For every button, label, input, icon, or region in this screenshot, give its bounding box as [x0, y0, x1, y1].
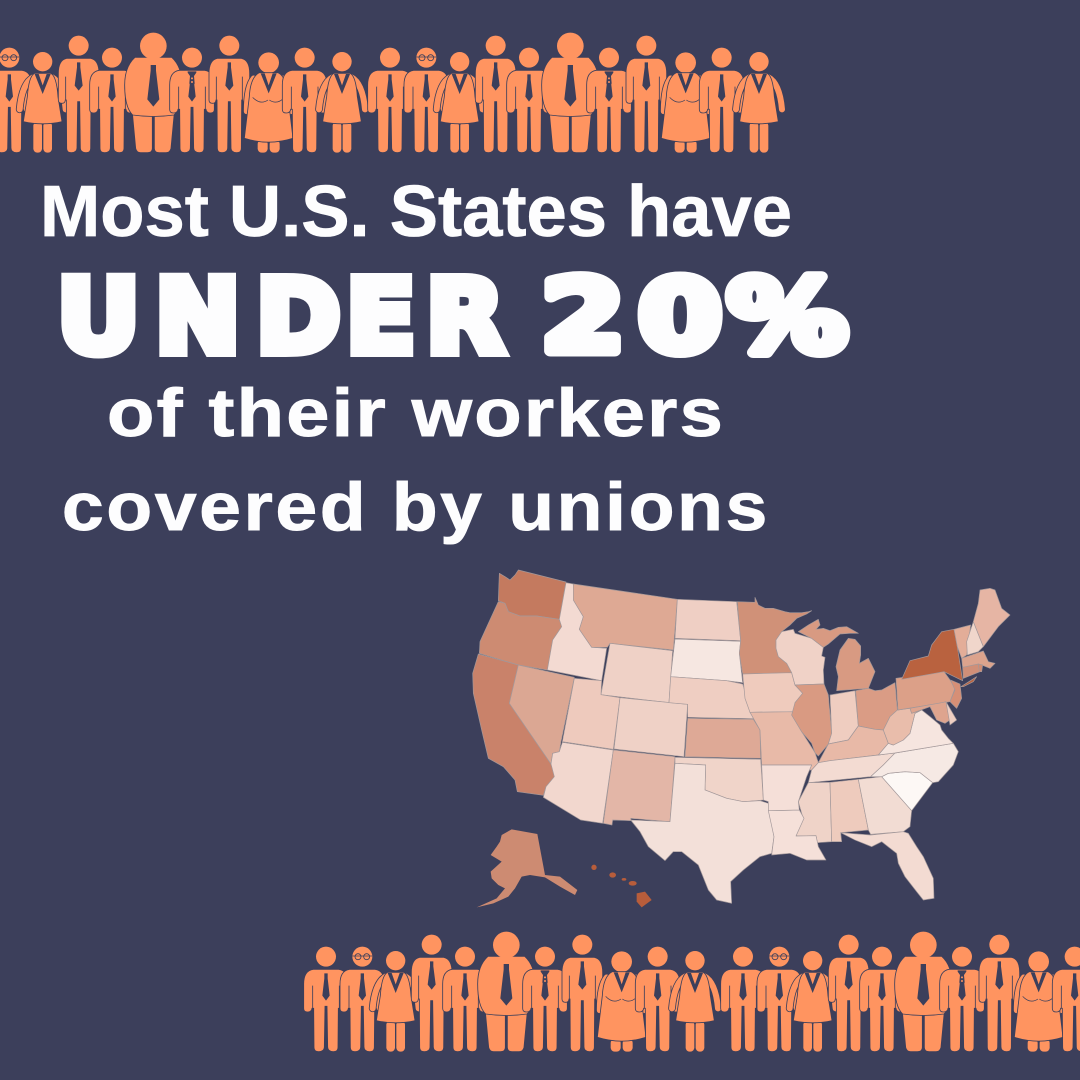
- central and eastern states: [737, 588, 1010, 900]
- bottom row of people icons: [304, 932, 1080, 1052]
- western states: [473, 570, 774, 903]
- title line: Most U.S. States have: Most U.S. States have: [40, 172, 792, 252]
- title line: of their workers: of their workers: [107, 375, 725, 451]
- title line: covered by unions: covered by unions: [62, 469, 770, 545]
- title emphasis: UNDER 20%: [57, 258, 847, 377]
- Hawaii: [591, 865, 652, 907]
- title emphasis: UNDER 20%: 20%: [541, 259, 847, 375]
- title: [40, 172, 847, 545]
- title emphasis: UNDER 20%: UNDER: [57, 258, 505, 377]
- choropleth map of U.S. states: [473, 570, 1010, 907]
- top row of people icons: [0, 33, 782, 153]
- Alaska: [477, 829, 577, 907]
